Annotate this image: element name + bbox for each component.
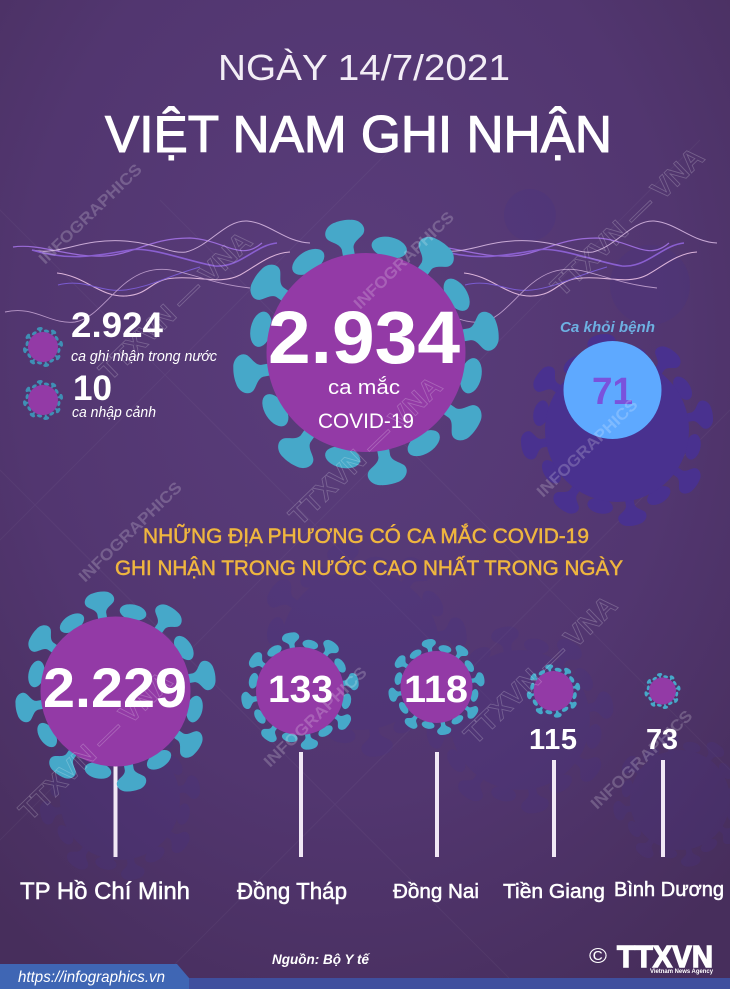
lollipop: TP Hồ Chí Minh: 2.229: [43, 656, 187, 719]
lollipop: Tiền Giang: Tiền Giang: [503, 881, 605, 903]
lollipop: Đồng Tháp: Đồng Tháp: [237, 878, 347, 904]
footer url: https://infographics.vn: [18, 969, 165, 986]
icon: small virus imported: [23, 380, 63, 420]
total caption line 2: COVID-19: [318, 410, 414, 433]
title: main heading: VIỆT NAM GHI NHẬN: [105, 106, 612, 164]
lollipop: TP Hồ Chí Minh: TP Hồ Chí Minh: [20, 878, 190, 905]
domestic cases block: [23, 306, 218, 367]
lollipop: Bình Dương: 73: [646, 724, 678, 756]
lollipop: Tiền Giang: 115: [529, 724, 577, 756]
imported caption: ca nhập cảnh: [72, 405, 156, 421]
total number: 2.934: [268, 296, 460, 379]
watermarks: TTXVN — VNA: [458, 589, 623, 750]
imported number: 10: [73, 369, 112, 408]
logo: TTXVN: Vietnam News Agency: [650, 969, 714, 975]
imported cases block: [23, 369, 156, 421]
watermarks: TTXVN — VNA: [283, 370, 448, 531]
lollipop: Tiền Giang: [503, 664, 605, 903]
lollipop: Đồng Tháp: [237, 631, 360, 904]
recovered label: Ca khỏi bệnh: [560, 319, 655, 336]
section heading: GHI NHẬN TRONG NƯỚC CAO NHẤT TRONG NGÀY: [115, 557, 623, 580]
main virus: total cases: [231, 217, 501, 488]
watermarks: INFOGRAPHICS: [351, 209, 458, 313]
watermarks: INFOGRAPHICS: [588, 707, 696, 813]
lollipop: Bình Dương: Bình Dương: [614, 879, 724, 901]
lollipop: Đồng Tháp: 133: [268, 669, 333, 711]
lollipop: Đồng Nai: 118: [404, 669, 468, 711]
watermarks: [13, 141, 710, 826]
recovered panel: [519, 319, 715, 528]
lollipop: TP Hồ Chí Minh: [13, 589, 218, 905]
recovered number: 71: [592, 371, 633, 413]
title: date: NGÀY 14/7/2021: [218, 47, 510, 88]
domestic number: 2.924: [71, 306, 164, 345]
decorative waves: [5, 221, 717, 322]
watermarks: INFOGRAPHICS: [534, 396, 642, 501]
lollipop: Bình Dương: [614, 673, 724, 901]
total caption line 1: ca mắc: [328, 376, 400, 399]
watermarks: TTXVN — VNA: [13, 665, 178, 826]
faint background viruses: [38, 189, 730, 882]
source note: Nguồn: Bộ Y tế: [272, 951, 370, 967]
recovered virus backdrop: [519, 332, 715, 528]
section heading: [115, 524, 623, 580]
watermarks: TTXVN — VNA: [545, 141, 710, 302]
logo: TTXVN: TTXVN: [617, 939, 713, 974]
watermarks: TTXVN — VNA: [93, 225, 258, 386]
footer bar: [0, 964, 730, 989]
domestic caption: ca ghi nhận trong nước: [71, 349, 218, 365]
watermarks: INFOGRAPHICS: [76, 479, 186, 586]
icon: small virus domestic: [23, 327, 63, 367]
logo: TTXVN: ©: [589, 945, 608, 968]
section heading: NHỮNG ĐỊA PHƯƠNG CÓ CA MẮC COVID-19: [143, 524, 589, 548]
watermarks: INFOGRAPHICS: [261, 664, 371, 771]
watermarks: INFOGRAPHICS: [36, 161, 146, 268]
lollipop: Đồng Nai: Đồng Nai: [393, 881, 479, 903]
lollipop: Đồng Nai: [387, 638, 486, 903]
recovered circle: [564, 341, 662, 439]
